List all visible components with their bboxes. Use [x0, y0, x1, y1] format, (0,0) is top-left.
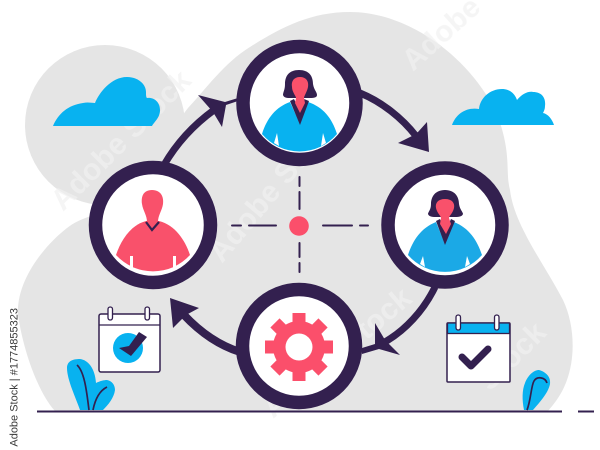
- center crosshair: [232, 177, 368, 272]
- cloud left: [53, 77, 160, 126]
- calendar left: [99, 307, 160, 372]
- stock id: Adobe Stock | #1774855323: [8, 308, 20, 447]
- torso: [116, 221, 190, 271]
- watermark: Stock: [472, 316, 553, 397]
- neck and face: [292, 77, 308, 113]
- arrow: top to right: [360, 93, 429, 152]
- node: bottom gear: [242, 290, 356, 402]
- cloud right: [452, 89, 554, 125]
- shirt: [408, 222, 482, 272]
- gear icon: [265, 313, 333, 381]
- shirt slits: [274, 133, 326, 146]
- ground line: [37, 410, 594, 412]
- node: right woman: [388, 168, 502, 282]
- gear hole: [286, 334, 312, 360]
- plant left: [67, 359, 115, 410]
- slits: [420, 256, 470, 267]
- watermark: [45, 0, 553, 424]
- head: [142, 190, 163, 222]
- check badge: [113, 333, 143, 363]
- check mark: [462, 349, 488, 366]
- node: left man: [96, 168, 210, 282]
- arrow: right to bottom: [362, 287, 435, 355]
- hair: [428, 190, 463, 217]
- collar: [436, 219, 455, 245]
- arrow: bottom to left: [170, 298, 240, 352]
- collar: [290, 99, 309, 125]
- node: top woman: [243, 46, 356, 160]
- watermark: Adobe Stock: [256, 281, 418, 424]
- watermark: Adobe Stock: [202, 107, 345, 268]
- collar: [146, 222, 159, 230]
- arrow: left to top: [164, 95, 238, 165]
- hair: [283, 70, 317, 98]
- slits: [130, 256, 176, 270]
- neck and face: [436, 199, 454, 234]
- plant right: [523, 370, 550, 410]
- shirt: [262, 102, 337, 151]
- calendar right: [447, 315, 510, 382]
- watermark: Adobe Stock: [45, 64, 198, 217]
